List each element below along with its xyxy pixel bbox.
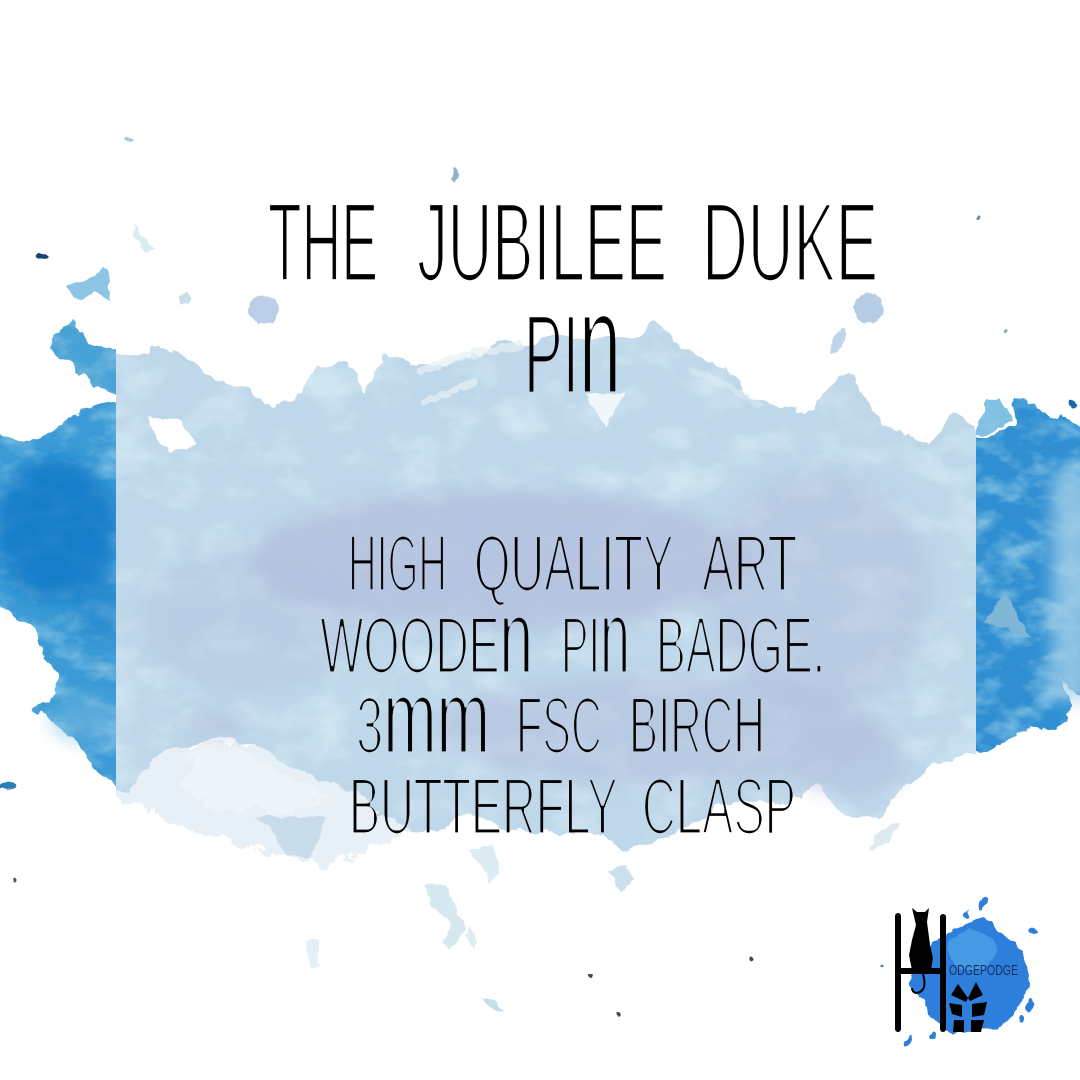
logo cat (909, 908, 933, 970)
panel: pale washed splash (100, 322, 990, 865)
body line 1: ART (702, 519, 797, 609)
title line 2: PIn (524, 261, 621, 424)
logo splash highlight (948, 930, 996, 970)
body line 1: QUALITY (474, 519, 674, 609)
panel: ring arcs (420, 346, 760, 405)
logo gift (949, 982, 987, 1032)
body line 2: PIn (561, 578, 630, 696)
watercolor splash: left side (0, 267, 116, 786)
panel: pale lower fringe (110, 745, 420, 865)
body line 2 (320, 578, 825, 696)
panel: white hole (150, 418, 198, 452)
panel: main wash (100, 322, 990, 850)
body text (320, 519, 825, 852)
title line 1: DUKE (702, 180, 878, 305)
title line 1: JUBILEE (417, 180, 667, 305)
watercolor splash: right side (976, 398, 1080, 753)
logo wordmark: ODGEPODGE (949, 962, 1018, 979)
body line 2: WOODEn (320, 578, 533, 696)
title (268, 180, 878, 424)
body line 2: BADGE. (656, 601, 825, 691)
body line 1: HIGH (348, 519, 447, 609)
logo: Hodgepodge (880, 895, 1038, 1048)
panel: pale bay at bottom left (188, 741, 238, 749)
panel: dark inlet at bottom left (255, 815, 325, 858)
body line 1 (348, 519, 797, 609)
logo letter H (895, 913, 946, 1032)
body line 3: BIRCH (629, 681, 765, 771)
body line 3: FSC (516, 681, 602, 771)
body line 4: BUTTERFLY (349, 762, 618, 852)
logo cat tail (912, 974, 924, 993)
logo splash (880, 895, 1038, 1048)
panel: lavender centre (140, 470, 930, 796)
body line 3 (356, 658, 765, 776)
body line 4: CLASP (642, 762, 796, 852)
body line 3: 3mm (356, 658, 490, 776)
title line 1: THE (268, 180, 378, 305)
panel: small white notch below Pin (585, 392, 625, 428)
